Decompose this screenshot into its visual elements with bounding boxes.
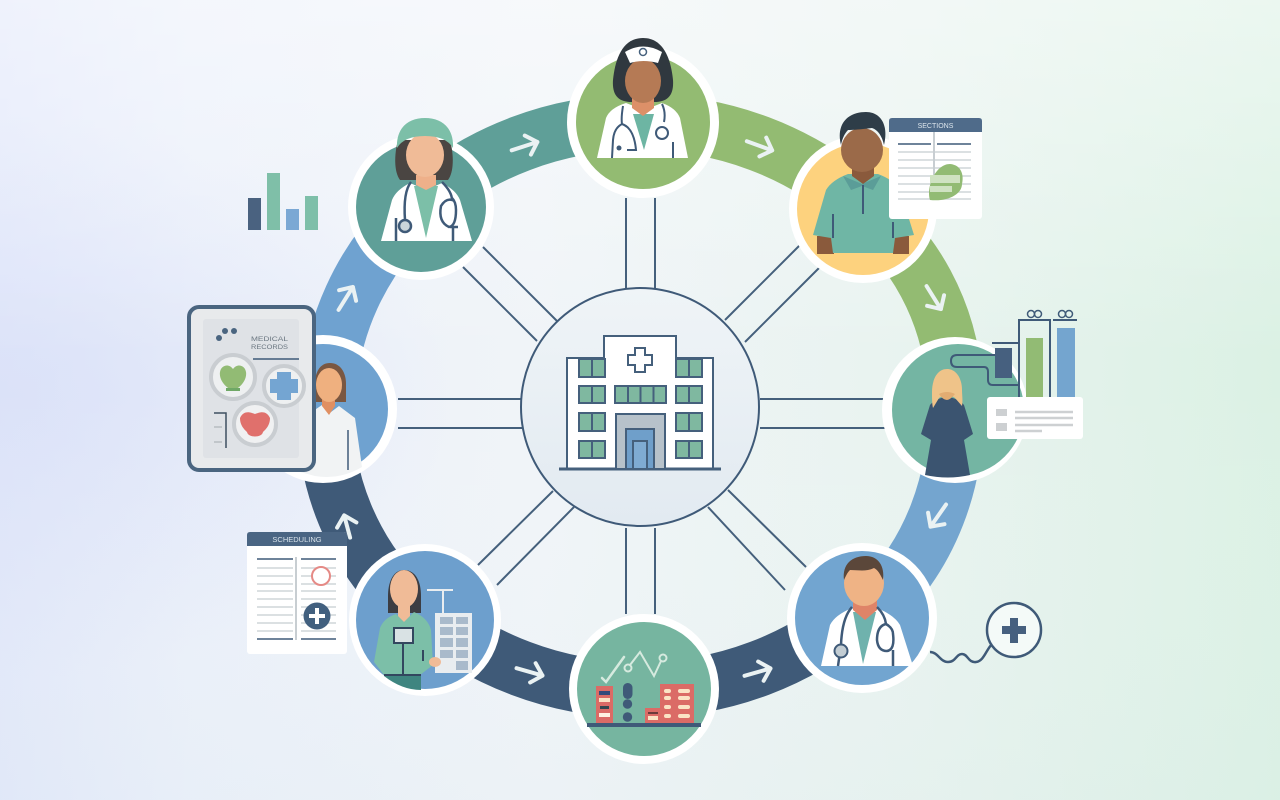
plus badge bbox=[304, 602, 330, 630]
arrow 5 bbox=[742, 659, 773, 685]
neck and face bbox=[398, 604, 410, 622]
neck bbox=[853, 598, 877, 620]
building model bbox=[435, 613, 472, 673]
record card: top right: SECTIONS bbox=[918, 123, 954, 130]
record card: top right bbox=[889, 118, 982, 219]
stethoscope bbox=[838, 607, 893, 666]
scrubs bbox=[414, 186, 438, 238]
green organ illustration bbox=[929, 164, 963, 200]
legend card bbox=[987, 397, 1083, 439]
node: top left doctor bbox=[348, 118, 494, 280]
node: right woman bbox=[882, 337, 1028, 483]
nurse cap bbox=[625, 46, 662, 63]
small red block bbox=[645, 708, 661, 723]
dark coat bbox=[921, 397, 973, 478]
hand bbox=[429, 657, 441, 667]
cap bbox=[397, 118, 453, 148]
arrow 6 bbox=[514, 659, 545, 685]
arrow 1 bbox=[509, 132, 540, 160]
node: left staff bbox=[249, 335, 397, 483]
hair bbox=[840, 112, 885, 145]
white coat bbox=[821, 608, 913, 666]
arrow 3 bbox=[918, 281, 949, 314]
stethoscope bbox=[612, 104, 673, 158]
red circle bbox=[312, 567, 330, 585]
chart panel: right bbox=[987, 310, 1083, 439]
bracket bbox=[214, 413, 226, 448]
node: top nurse bbox=[567, 38, 719, 198]
segment: teal top left bbox=[419, 122, 640, 205]
segment: navy bottom right bbox=[640, 607, 861, 690]
tablet panel: RECORDS bbox=[251, 344, 289, 351]
node: top right patient bbox=[789, 112, 937, 283]
ground line bbox=[587, 723, 701, 727]
red heart badge bbox=[234, 403, 276, 445]
tablet on stand bbox=[394, 628, 413, 643]
dots bbox=[623, 683, 632, 722]
segment: green top right bbox=[640, 122, 861, 205]
hair bbox=[315, 363, 346, 402]
neck and face bbox=[632, 98, 654, 116]
connector spokes bbox=[398, 198, 885, 614]
big red block bbox=[660, 684, 694, 723]
head bbox=[841, 128, 883, 172]
icon: hospital building bbox=[559, 336, 721, 469]
blue cross badge bbox=[264, 366, 304, 406]
face bbox=[316, 368, 342, 402]
node: lower right doctor bbox=[787, 543, 937, 693]
green heart badge bbox=[211, 355, 255, 399]
neck and face bbox=[416, 175, 436, 190]
teal top bbox=[374, 612, 433, 675]
arrow 7 bbox=[334, 513, 360, 540]
white coat bbox=[300, 405, 362, 477]
node: lower left staff bbox=[349, 544, 501, 696]
ring arrows bbox=[330, 132, 954, 685]
hair bbox=[388, 570, 421, 613]
scrubs bbox=[633, 114, 654, 150]
record card: lower left bbox=[247, 532, 347, 654]
arrow 2 bbox=[743, 132, 776, 160]
white coat bbox=[381, 183, 472, 241]
check and trend line bbox=[602, 652, 666, 682]
tablet panel bbox=[189, 307, 314, 470]
stethoscope bbox=[396, 182, 458, 241]
record card: lower left: SCHEDULING bbox=[272, 535, 322, 544]
scrubs bbox=[853, 612, 876, 664]
face bbox=[844, 560, 884, 606]
neck bbox=[852, 165, 874, 184]
hub: hospital bbox=[521, 288, 759, 526]
hair bbox=[932, 369, 962, 408]
left red block bbox=[596, 686, 613, 723]
dots bbox=[216, 328, 237, 341]
segment: green right bbox=[863, 209, 955, 410]
teal shirt bbox=[813, 174, 914, 253]
segment: blue lower right bbox=[862, 410, 955, 618]
arrow 8 bbox=[330, 282, 361, 315]
trousers bbox=[384, 675, 421, 690]
hair bbox=[395, 140, 453, 180]
plus callout with wavy line bbox=[930, 603, 1041, 662]
ring segments bbox=[326, 122, 955, 690]
pipe lines bbox=[951, 343, 1018, 385]
segment: navy bottom left bbox=[419, 607, 640, 690]
arrow 4 bbox=[922, 499, 954, 532]
node: bottom chart scene bbox=[569, 614, 719, 764]
arms bbox=[817, 236, 909, 254]
segment: navy lower left bbox=[326, 409, 425, 620]
white coat bbox=[597, 103, 688, 158]
hair bbox=[844, 556, 883, 580]
neck bbox=[322, 398, 335, 415]
bar chart bbox=[248, 173, 318, 230]
segment: blue upper left bbox=[328, 205, 419, 406]
small label: MEDICAL bbox=[251, 336, 288, 343]
hair bbox=[613, 38, 673, 102]
